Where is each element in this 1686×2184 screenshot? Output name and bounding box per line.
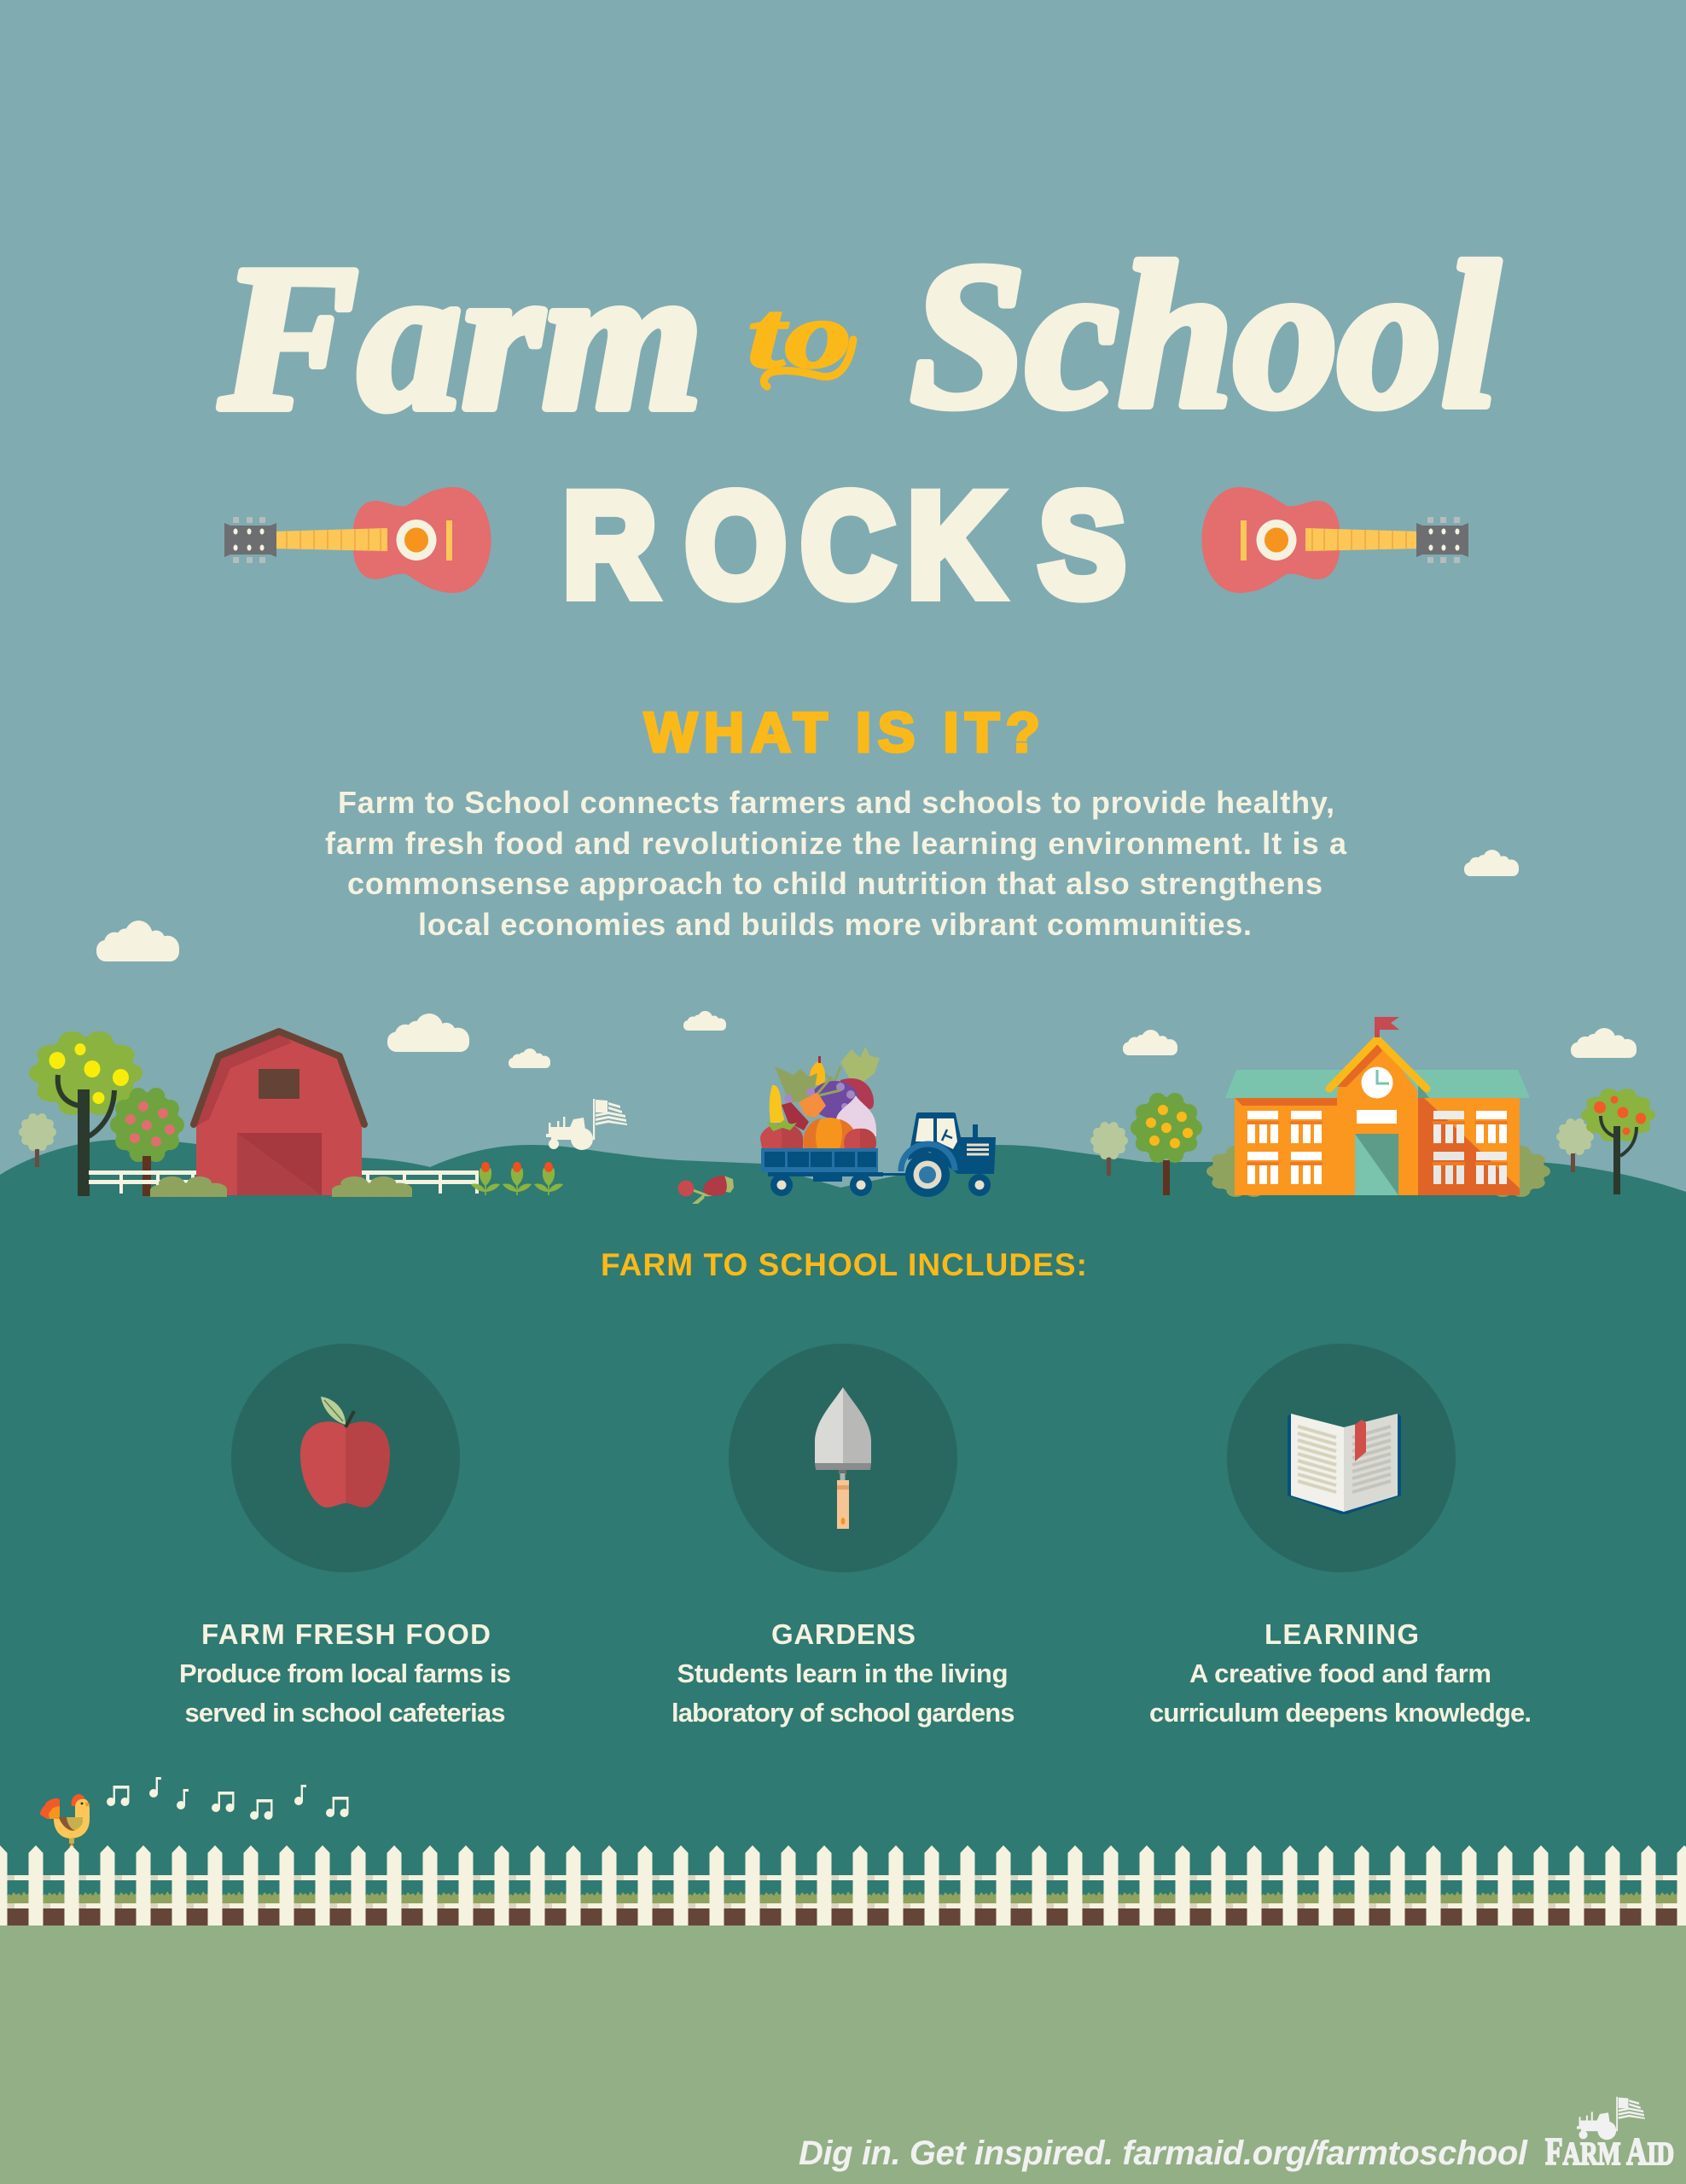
subheading: farm to school includes: FARM TO SCHOOL INCLUDES: [601,1247,1087,1282]
icon: apple [231,1344,460,1572]
icon: right guitar [1201,487,1468,593]
icon: garden trowel [729,1344,957,1572]
description: learning [1149,1658,1532,1728]
scene: orange school [1225,1017,1530,1195]
icon: music notes [107,1777,348,1820]
panel: gardens [671,1344,1015,1728]
description: farm fresh food: Produce from local farms is [179,1658,511,1688]
heading: farm fresh food: FARM FRESH FOOD [201,1618,491,1650]
clouds [96,850,1637,1068]
description: gardens: laboratory of school gardens [671,1698,1015,1728]
scene: left trees [19,1031,184,1196]
title: Farm to School [219,220,1499,453]
scene: flowers [471,1162,563,1195]
panel: learning [1149,1344,1532,1728]
heading: gardens: GARDENS [771,1618,916,1650]
scene: trees beside school [1090,1089,1655,1195]
intro paragraph: Farm to School connects farmers and schools to provide healthy, [338,785,1334,820]
picket fence [0,1845,1686,1926]
scene: barn bushes [150,1176,412,1197]
green hill and teal field [0,1139,1686,1928]
footer: Farm Aid logo [1545,2097,1674,2173]
title: Farm to School: to [747,282,852,388]
footer: Farm Aid logo: FARM AID [1545,2130,1674,2173]
scene: red barn [194,1031,364,1195]
footer call to action: Dig in. Get inspired. farmaid.org/farmtoschool [799,2135,1528,2172]
icon: rooster [40,1794,90,1847]
intro paragraph [325,785,1347,942]
scene: school bushes [1206,1146,1550,1197]
icon: open book [1227,1344,1456,1572]
title: Farm to School: Farm [219,223,703,453]
bottom green band [0,1926,1686,2184]
description: learning: curriculum deepens knowledge. [1149,1698,1532,1728]
heading: what is it: WHAT IS IT? [644,700,1040,764]
intro paragraph: commonsense approach to child nutrition that also strengthens [347,866,1323,901]
description: farm fresh food: served in school cafeterias [184,1698,505,1728]
title: Farm to School: School [910,220,1499,450]
scene: produce pile on trailer [760,1047,880,1148]
description: learning: A creative food and farm [1189,1658,1491,1688]
icon: left guitar [224,487,491,593]
scene: white fence [89,1170,479,1194]
description: gardens [671,1658,1015,1728]
scene: white tractor with flag [546,1099,627,1150]
intro paragraph: farm fresh food and revolutionize the learning environment. It is a [325,826,1347,861]
scene: blue trailer [761,1148,908,1196]
intro paragraph: local economies and builds more vibrant communities. [418,907,1252,942]
panel: farm fresh food [179,1344,511,1728]
description: gardens: Students learn in the living [677,1658,1009,1688]
heading: learning: LEARNING [1264,1618,1419,1650]
description: farm fresh food [179,1658,511,1728]
title: ROCKS: ROCKS [563,463,1125,627]
scene: fallen fruit [677,1176,734,1204]
scene: blue tractor [901,1112,996,1197]
